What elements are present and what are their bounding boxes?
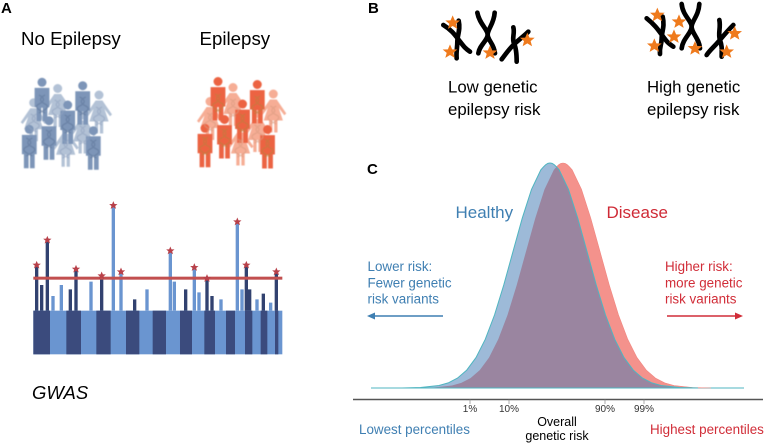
x axis bbox=[353, 400, 763, 404]
baseline bbox=[371, 387, 744, 389]
disease curve bbox=[415, 163, 711, 388]
text: high genetic epilepsy risk: High genetic bbox=[647, 78, 740, 96]
axis percentile labels bbox=[463, 404, 654, 415]
label: lowest percentiles: Lowest percentiles bbox=[359, 422, 470, 437]
overlap area bbox=[434, 167, 674, 388]
icon: chromosomes, low risk bbox=[443, 13, 535, 62]
healthy outline bbox=[402, 163, 698, 388]
axis percentile labels: 10% bbox=[499, 404, 519, 415]
significant hit stars bbox=[32, 201, 280, 282]
significance threshold line bbox=[33, 277, 282, 280]
light stems bbox=[53, 205, 271, 311]
axis percentile labels: 99% bbox=[634, 404, 654, 415]
text: higher risk: more genetic bbox=[665, 276, 743, 290]
panel label C: C bbox=[367, 161, 378, 178]
text: higher risk: Higher risk: bbox=[665, 259, 733, 274]
label: Healthy: Healthy bbox=[456, 203, 514, 222]
text: lower risk: Lower risk: bbox=[368, 259, 432, 274]
chart: risk distributions bbox=[371, 163, 744, 388]
text: low genetic epilepsy risk: Low genetic bbox=[448, 78, 538, 96]
healthy curve bbox=[402, 163, 698, 388]
heading: No Epilepsy: No Epilepsy bbox=[21, 28, 121, 49]
icon group: orange people bbox=[197, 77, 286, 168]
dark stems bbox=[37, 240, 276, 311]
chromosome bar bbox=[33, 311, 282, 354]
icon group: blue people bbox=[21, 78, 112, 170]
axis percentile labels: 1% bbox=[463, 404, 477, 415]
arrow: right bbox=[667, 312, 743, 320]
text: lower risk: risk variants bbox=[368, 292, 439, 306]
text: high genetic epilepsy risk: epilepsy risk bbox=[647, 100, 740, 119]
text: higher risk: risk variants bbox=[665, 292, 737, 306]
text: lower risk: Fewer genetic bbox=[368, 276, 452, 290]
icon: chromosomes, high risk bbox=[647, 4, 742, 58]
label: Disease: Disease bbox=[606, 203, 668, 222]
axis title: overall genetic risk: genetic risk bbox=[525, 429, 589, 443]
label: highest percentiles: Highest percentiles bbox=[650, 422, 764, 437]
axis title: overall genetic risk: Overall bbox=[537, 415, 577, 429]
text: low genetic epilepsy risk: epilepsy risk bbox=[448, 100, 541, 119]
caption: GWAS: GWAS bbox=[32, 382, 89, 403]
panel label B: B bbox=[368, 0, 379, 17]
panel label A: A bbox=[1, 0, 12, 17]
heading: Epilepsy: Epilepsy bbox=[200, 28, 271, 49]
chart: GWAS manhattan plot bbox=[32, 201, 282, 354]
axis percentile labels: 90% bbox=[595, 404, 615, 415]
arrow: left bbox=[367, 312, 443, 320]
